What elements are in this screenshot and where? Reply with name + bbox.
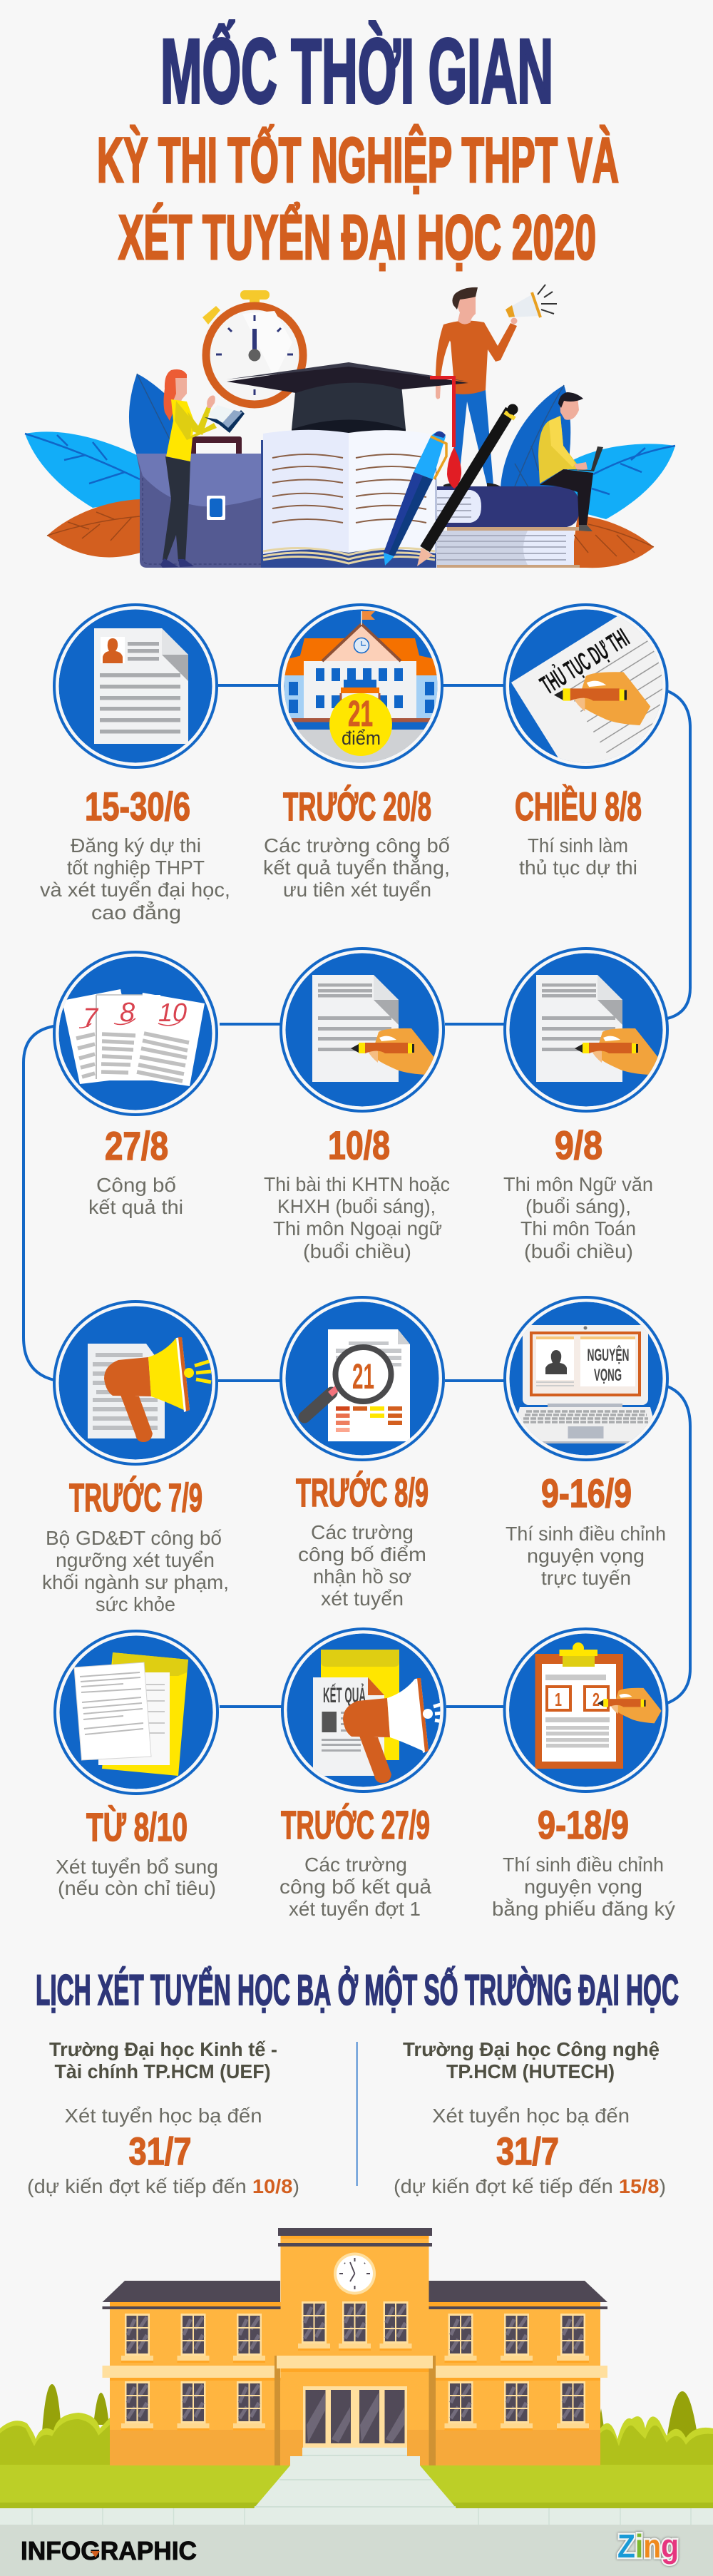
step 11: trước 27/9 [279,1629,450,1920]
standing man with megaphone [436,285,557,486]
description [42,1527,229,1615]
door [303,2386,407,2448]
description [298,1521,426,1610]
icon: envelope with papers [60,1636,212,1789]
screen label: NGUYỆN [588,1345,629,1365]
step 12: 9-18/9 [492,1629,675,1920]
description: nhận hồ sơ [313,1565,411,1588]
step 5: 10/8 [264,949,450,1262]
icon: graded papers [58,957,212,1110]
badge number: 21 [348,693,373,734]
left leaves [25,374,175,557]
step 8: trước 8/9 [281,1297,443,1610]
step 9: 9-16/9 [505,1297,667,1589]
windows [121,2301,589,2431]
icon: score sheet with magnifier [285,1302,439,1455]
description [506,1523,666,1589]
badge label: điểm [342,727,381,749]
icon: exam paper with hand [509,953,663,1107]
step 3: chiều 8/8 [503,603,669,877]
description: Thí sinh điều chỉnh [506,1523,666,1545]
date: TRƯỚC 7/9 [69,1475,202,1520]
briefcase [136,436,262,568]
trees and hedges [0,2384,713,2466]
steps and path [254,2448,456,2508]
wings [103,2281,607,2465]
description: (buổi chiều) [303,1240,411,1262]
magnified score: 21 [352,1356,374,1396]
description: Các trường công bố [264,834,450,857]
description: Các trường [304,1854,407,1876]
description: Đăng ký dự thi [71,834,201,857]
description: (buổi sáng), [525,1195,631,1217]
description: Bộ GD&ĐT công bố [46,1527,222,1549]
title [97,21,619,272]
pen [384,431,446,566]
date: 27/8 [105,1123,168,1168]
right leaves [501,385,675,568]
description: tốt nghiệp THPT [67,857,205,879]
icon: orange wedge in G [91,2551,100,2557]
description: (nếu còn chỉ tiêu) [58,1877,216,1899]
icon: CV document [58,609,212,763]
description: Xét tuyển bổ sung [56,1856,218,1878]
tassel [430,376,461,489]
connector lines between circles [24,685,690,1707]
icon: laptop: VỌNG [594,1366,622,1385]
description: Thí sinh điều chỉnh [503,1854,664,1876]
date: TRƯỚC 8/9 [296,1470,429,1515]
icon: document with megaphone [58,1307,212,1459]
open book [261,430,436,568]
description: (buổi chiều) [524,1240,633,1262]
box numbers: 1 [555,1689,562,1710]
divider [356,2042,358,2186]
icon: clipboard with hand [509,1633,662,1787]
woman reading [160,369,245,568]
next round note: (dự kiến đợt kế tiếp đến 10/8) [27,2175,299,2197]
description [503,1173,653,1262]
date: TRƯỚC 20/8 [283,784,431,829]
clock [334,2252,376,2295]
hero illustration [25,285,675,568]
description: KHXH (buổi sáng), [277,1195,436,1217]
description [88,1174,183,1218]
school building scene [0,2228,713,2525]
date: TRƯỚC 27/9 [281,1802,430,1847]
description: công bố kết quả [279,1876,431,1898]
icon: results paper with megaphone: KẾT QUẢ [323,1683,366,1707]
description: nguyện vọng [527,1545,645,1567]
university name: Trường Đại học Kinh tế - [49,2038,277,2060]
seated man with laptop [538,392,603,531]
description: Thí sinh làm [528,834,628,857]
description [519,834,637,879]
step 10: từ 8/10 [55,1631,218,1899]
description: xét tuyển đợt 1 [289,1898,421,1920]
handwritten grades: 7 [83,1003,99,1033]
logo: Zing: Zing [617,2528,679,2565]
pencil [417,404,518,566]
date: 15-30/6 [85,784,190,829]
panel: HUTECH: TP.HCM (HUTECH) [446,2060,615,2082]
description [56,1856,218,1899]
description: cao đẳng [91,901,181,924]
date: 31/7 [496,2130,559,2173]
date: 9-16/9 [541,1471,632,1516]
icon: school building with 21 điểm badge [282,609,442,769]
date: TỪ 8/10 [86,1804,188,1849]
next round note: (dự kiến đợt kế tiếp đến 15/8) [394,2175,666,2197]
panel: HUTECH [394,2038,666,2197]
step 7: trước 7/9 [42,1302,229,1615]
date: 31/7 [128,2130,191,2173]
panel: UEF: Tài chính TP.HCM (UEF) [54,2060,271,2082]
description: xét tuyển [321,1588,404,1610]
description: Thi môn Toán [520,1217,636,1240]
step 6: 9/8 [503,949,667,1262]
description [264,1173,450,1262]
icon: form with hand [509,609,662,763]
lawn [0,2465,713,2508]
icon: laptop [509,1302,663,1455]
date: CHIỀU 8/8 [515,784,642,829]
description: sức khỏe [96,1593,175,1615]
stopwatch [202,290,303,404]
footer band [0,2525,713,2576]
date: 9-18/9 [538,1802,629,1847]
description: trực tuyến [541,1567,631,1589]
description [263,834,450,901]
description: Thi bài thi KHTN hoặc [264,1173,450,1195]
university name: Trường Đại học Công nghệ [403,2038,660,2060]
icon: graded papers: 10 [158,998,187,1027]
description: khối ngành sư phạm, [42,1571,229,1593]
date: 10/8 [328,1123,390,1167]
pavement [0,2508,713,2525]
description [279,1854,431,1920]
intro: Xét tuyển học bạ đến [432,2105,630,2127]
icon: clipboard with hand: 2 [593,1689,600,1710]
description: kết quả thi [88,1196,183,1218]
step 2: trước 20/8 [263,605,450,901]
icon: exam paper with hand [285,953,439,1107]
description: thủ tục dự thi [519,857,637,879]
graduation cap [227,362,468,436]
description [40,834,230,924]
description: nguyện vọng [524,1876,642,1898]
description: Các trường [311,1521,414,1543]
step 1: 15-30/6 [40,605,230,924]
description: công bố điểm [298,1543,426,1565]
description: Công bố [96,1174,176,1196]
stack of books [437,486,580,568]
icon: results paper with megaphone [287,1633,450,1787]
date: 9/8 [555,1123,602,1167]
description: kết quả tuyển thẳng, [263,856,450,879]
panel: UEF [27,2038,299,2197]
description: Thi môn Ngoại ngữ [273,1217,442,1240]
description: và xét tuyển đại học, [40,879,230,901]
tower [277,2228,433,2465]
description: Thi môn Ngữ văn [503,1173,653,1195]
infographic label: INFOGRAPHIC [21,2536,197,2565]
icon: graded papers: 8 [120,998,135,1028]
step 4: 27/8 [54,952,217,1218]
description: ngưỡng xét tuyển [56,1549,215,1571]
description: bằng phiếu đăng ký [492,1898,675,1920]
description [492,1854,675,1920]
description: ưu tiên xét tuyển [283,879,431,901]
intro: Xét tuyển học bạ đến [64,2105,262,2127]
